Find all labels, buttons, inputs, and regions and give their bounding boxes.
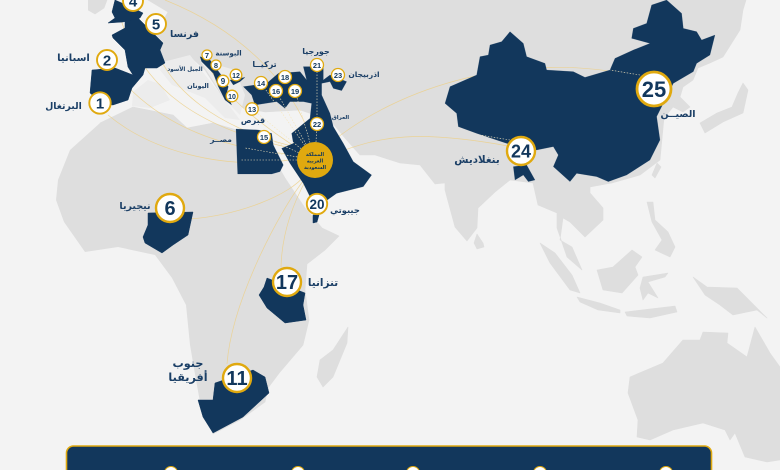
Java [577,297,620,313]
numbered markers: 13 [248,105,256,114]
country labels: جنوب [173,357,203,370]
numbered markers: 17 [276,272,298,294]
Nigeria [143,212,193,253]
Sumatra [540,243,580,293]
banner markers [164,466,672,470]
numbered markers: 10 [228,94,236,101]
numbered markers: 21 [313,61,321,70]
numbered markers: 5 [152,16,160,34]
numbered markers: 11 [226,368,248,390]
country labels: فرنسا [170,29,199,40]
Madagascar [317,327,348,387]
Taiwan [652,163,661,178]
numbered markers: 2 [103,52,111,70]
country labels: تركيــا [252,60,277,69]
Saudi Arabia hub: السعودية [304,165,326,171]
Balkans [200,57,372,202]
numbered markers: 1 [96,96,104,112]
numbered markers: 15 [260,133,268,142]
country labels: أفريقيا [168,370,208,384]
bottom banner [66,446,712,470]
country labels: البرتغال [45,101,82,112]
numbered markers: 14 [257,79,266,88]
Australia [628,327,780,462]
country labels: تنزانيا [308,277,338,289]
numbered markers: 20 [309,197,325,212]
Tanzania [259,278,306,323]
country labels: الصيــن [660,109,696,120]
Philippines [647,202,675,257]
country labels: جيبوتي [330,205,360,216]
numbered markers: 22 [313,120,321,129]
France [112,18,165,75]
South Africa [198,370,269,433]
Saudi Arabia hub [297,142,333,178]
radial links inside Saudi region [240,65,640,160]
China and Bangladesh [445,0,715,182]
numbered markers [89,0,671,392]
numbered markers: 12 [232,73,240,80]
Spain and Portugal [90,68,143,105]
numbered markers: 9 [221,77,226,86]
Japan [700,83,748,133]
country labels: مصــر [209,135,232,144]
numbered markers: 19 [291,87,299,96]
numbered markers: 7 [205,51,209,60]
Egypt [236,129,283,174]
country labels: نيجيريا [119,201,151,212]
numbered markers: 18 [281,73,289,82]
numbered markers: 16 [272,87,280,96]
numbered markers: 25 [642,77,666,102]
country labels: بنغلاديش [454,154,500,166]
numbered markers: 6 [164,198,176,220]
country labels: الجبل الأسود [167,65,203,73]
Borneo [597,250,642,293]
numbered markers: 8 [214,61,218,70]
Turkey, Georgia, Azerbaijan, Iraq, Saudi Arabia [243,67,372,202]
country labels: جورجيا [302,47,330,56]
Sri Lanka [474,234,484,249]
Saudi Arabia hub: العربية [307,158,324,164]
Saudi Arabia hub: المملكة [306,152,324,158]
numbered markers: 23 [334,71,342,80]
country labels: اذربيجان [348,70,380,79]
connection lines [108,0,636,364]
highlighted countries [90,0,715,433]
country labels: اسبانيا [57,53,90,64]
Djibouti [313,215,319,223]
New Guinea [693,277,767,318]
country labels: اليونان [187,82,209,90]
country labels: البوسنة [215,50,242,58]
country labels: العراق [332,115,349,121]
numbered markers: 24 [511,142,531,162]
United Kingdom [108,0,143,23]
Sulawesi [640,273,668,300]
country labels: قبرص [241,116,265,126]
country labels [45,29,696,384]
